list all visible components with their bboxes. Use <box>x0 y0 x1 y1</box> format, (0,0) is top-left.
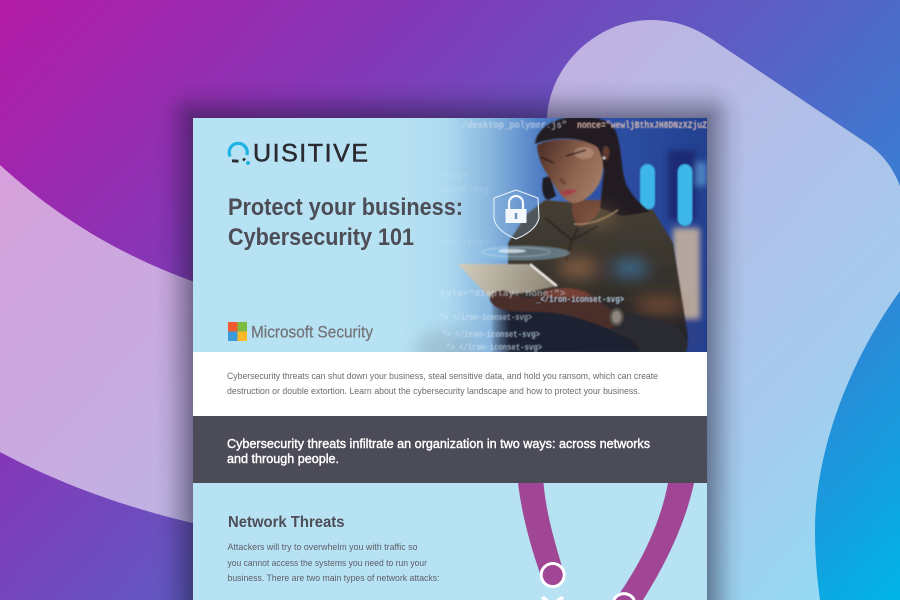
photo: code overlay <box>440 120 707 353</box>
photo: code overlay: ">_</iron-iconset-svg> <box>440 312 532 323</box>
panel: hero <box>193 117 707 370</box>
panel: network threats <box>193 483 707 600</box>
heading: Network Threats: Network Threats <box>228 514 344 531</box>
photo: hologram disc <box>470 246 570 260</box>
intro text: Cybersecurity threats can shut down your business, steal sensitive data, and hold you ransom, which can create <box>227 371 658 382</box>
photo: warm reflections <box>558 209 686 312</box>
background shape: left light band <box>0 165 215 528</box>
photo: code overlay: nset-svg> <box>440 238 489 248</box>
body text: you cannot access the systems you need to run your <box>228 558 427 568</box>
icon: shield with padlock <box>494 190 539 239</box>
key message text: Cybersecurity threats infiltrate an organization in two ways: across networks <box>227 437 650 451</box>
panel: intro <box>193 352 707 416</box>
body text: Attackers will try to overwhelm you with traffic so <box>228 542 418 552</box>
ribbon: left <box>518 483 563 576</box>
body text <box>228 542 440 583</box>
photo: glowing pills <box>640 164 692 226</box>
photo: woman <box>508 117 688 352</box>
logo: Microsoft Security: Microsoft Security <box>251 322 373 342</box>
photo: code overlay: ">_</iron-iconset-svg> <box>442 329 540 340</box>
panel: key message <box>193 416 707 483</box>
intro text: destruction or double extortion. Learn about the cybersecurity landscape and how to protect your business. <box>227 386 640 397</box>
photo: tablet <box>458 264 557 298</box>
title <box>228 194 463 251</box>
title: Protect your business: <box>228 194 463 221</box>
photo background details <box>668 150 707 352</box>
icon: white cross tips <box>540 596 564 600</box>
photo: code overlay: -svg> <box>440 171 467 181</box>
document <box>193 117 707 600</box>
photo: lower dark area <box>492 304 639 352</box>
key message text <box>227 437 650 466</box>
photo: lower left haze <box>414 326 476 352</box>
background shape: right light blob <box>540 20 900 600</box>
node: left ring <box>541 564 564 586</box>
hero photo <box>412 118 707 352</box>
photo: code overlay: _</iron-iconset-svg> <box>535 294 624 305</box>
body text: business. There are two main types of network attacks: <box>228 573 440 583</box>
photo: code overlay: tyle="display: none;"> <box>440 288 566 299</box>
logo: Quisitive: UISITIVE <box>253 140 368 168</box>
title: Cybersecurity 101 <box>228 224 414 251</box>
diagram: purple ribbons <box>518 483 694 600</box>
key message text: and through people. <box>227 452 339 466</box>
node: right ring <box>614 594 634 600</box>
ribbon: right <box>615 483 694 600</box>
photo: hands and forearm <box>490 288 688 352</box>
photo: code overlay: ">_</iron-iconset-svg> <box>446 342 542 353</box>
intro text <box>227 371 658 397</box>
photo: code overlay: /desktop_polymer.js" <box>462 120 567 132</box>
photo: code overlay: onset-svg <box>440 185 489 195</box>
photo: code overlay: nonce="wewljBthxJH8DNzXZjuZ <box>577 120 707 132</box>
document shadow <box>155 80 745 600</box>
